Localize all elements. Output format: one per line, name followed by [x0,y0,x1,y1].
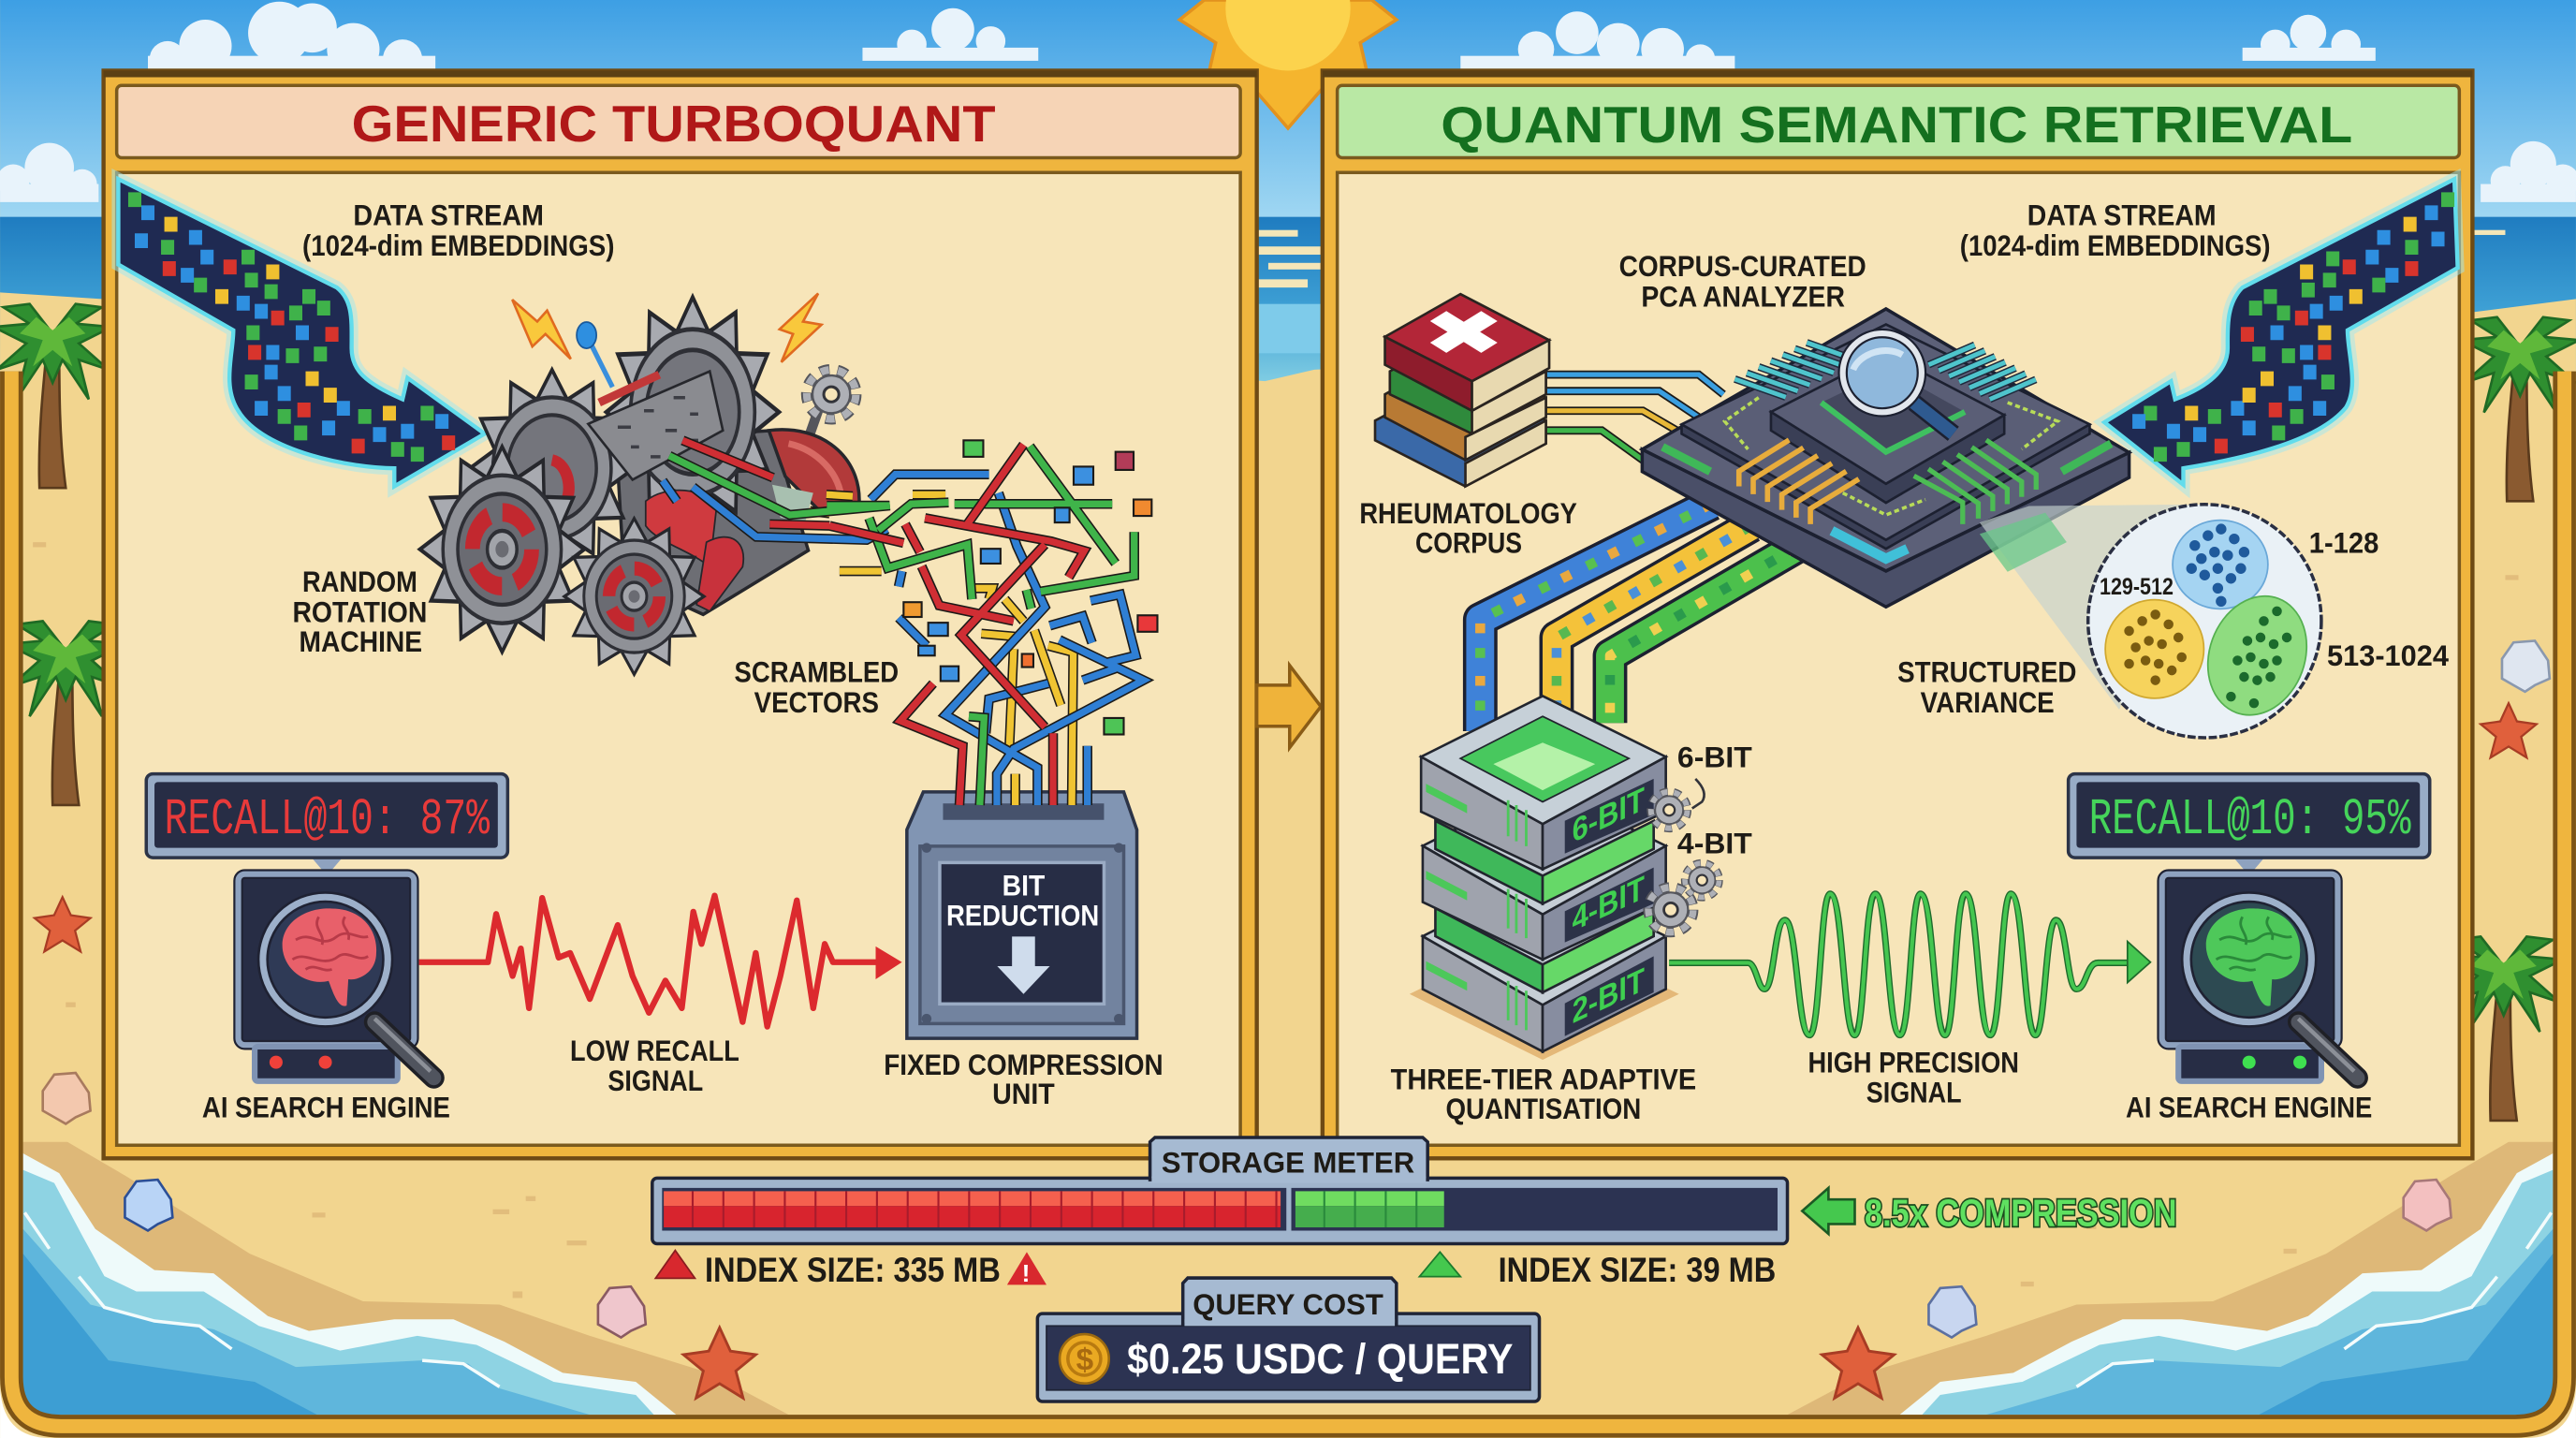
left shoreline waves [23,1142,788,1415]
label: range 513-1024: 513-1024 [2327,638,2449,672]
high precision signal [1669,894,2150,1035]
label: three-tier adaptive quantisation: THREE-TIER ADAPTIVE [1391,1063,1696,1096]
label: rheumatology corpus: CORPUS [1415,526,1522,560]
label: fixed compression unit: FIXED COMPRESSION [884,1048,1164,1081]
label: low recall signal: SIGNAL [607,1064,703,1097]
label: structured variance: STRUCTURED [1897,654,2076,688]
icon: usdc coin [1060,1334,1109,1384]
three-tier adaptive quantisation stack [1410,696,1679,1060]
title band: generic turboquant: GENERIC TURBOQUANT [352,95,996,153]
label: structured variance: VARIANCE [1921,685,2055,719]
label: low recall signal: LOW RECALL [570,1034,739,1067]
label: random rotation machine: ROTATION [292,594,427,628]
arrow: compression [1802,1188,1854,1234]
icon: usdc coin: $ [1076,1343,1094,1378]
label: rheumatology corpus [1359,496,1577,560]
data stream ribbon right [2104,179,2458,485]
label: three-tier adaptive quantisation [1391,1063,1696,1125]
storage meter tab: STORAGE METER [1162,1145,1414,1179]
icon: stack cogs [1648,779,1720,932]
label: high precision signal: SIGNAL [1866,1075,1962,1108]
panel: quantum semantic retrieval [1323,70,2472,1158]
data stream ribbon left [118,179,485,486]
label: low recall signal [570,1034,739,1097]
label: ai search engine left: AI SEARCH ENGINE [202,1090,450,1123]
label: corpus-curated pca analyzer: PCA ANALYZER [1641,279,1845,313]
label: range 1-128: 1-128 [2309,526,2378,560]
index size red marker [655,1251,695,1278]
ai search engine right [2162,874,2358,1081]
label: fixed compression unit [884,1048,1164,1110]
label: data stream: (1024-dim EMBEDDINGS) [302,228,614,262]
query cost: $0.25 USDC / QUERY [1127,1335,1513,1383]
label: data stream: (1024-dim EMBEDDINGS) [1960,228,2271,262]
title band: quantum semantic retrieval [1338,85,2459,157]
arrow: between panels [1257,666,1321,748]
query cost tab [1183,1278,1397,1326]
clouds [0,2,2576,202]
label: data stream: DATA STREAM [353,198,544,231]
bar: green index size [1295,1191,1444,1227]
icon: warning triangle [1007,1252,1046,1287]
label: high precision signal: HIGH PRECISION [1808,1046,2019,1079]
text: 4-bit plate: 4-BIT [1573,869,1645,939]
label: random rotation machine: RANDOM [302,565,417,598]
label: scrambled vectors: VECTORS [754,685,879,719]
text: 2-bit plate: 2-BIT [1573,961,1645,1031]
label: random rotation machine: MACHINE [299,624,422,658]
ai search engine left [239,874,433,1081]
recall display: 95%: RECALL@10: 95% [2089,792,2411,849]
query cost tab: QUERY COST [1193,1287,1383,1321]
wires from corpus to analyzer [1546,374,1723,460]
index size green marker [1419,1252,1460,1277]
label: data stream [302,198,614,262]
storage meter tab [1150,1137,1427,1183]
label: rheumatology corpus: RHEUMATOLOGY [1359,496,1577,530]
icon: lightning bolts [512,293,822,362]
label: 6-bit: 6-BIT [1677,741,1752,774]
random rotation machine [420,297,859,674]
label: range 129-512: 129-512 [2100,575,2174,600]
icon: red brain [283,908,376,1006]
scrambled vectors [663,440,1157,805]
data ribbons from analyzer to quantiser [1480,504,1796,731]
label: scrambled vectors: SCRAMBLED [735,654,899,688]
starfish and shells [35,640,2550,1398]
bar: red index size [664,1191,1281,1227]
storage meter [652,1137,1788,1244]
structured variance inset [1980,505,2323,738]
sun [1179,0,1397,128]
title band: generic turboquant [117,85,1240,157]
label: high precision signal [1808,1046,2019,1108]
panel: generic turboquant [104,70,1257,1158]
icon: warning triangle: ! [1022,1259,1030,1287]
bit reduction compression unit [907,792,1137,1038]
rheumatology corpus books [1375,294,1549,486]
text: 6-bit plate: 6-BIT [1573,780,1645,850]
pca analyzer chip [1642,309,2130,607]
label: three-tier adaptive quantisation: QUANTISATION [1445,1092,1641,1125]
label: corpus-curated pca analyzer [1619,249,1866,313]
label: index size 335 mb: INDEX SIZE: 335 MB [705,1251,1001,1289]
label: fixed compression unit: UNIT [992,1077,1055,1110]
label: data stream: DATA STREAM [2027,198,2217,231]
label: 4-bit: 4-BIT [1677,827,1752,860]
label: index size 39 mb: INDEX SIZE: 39 MB [1499,1251,1776,1289]
palm trees [0,304,2576,1121]
outer gold frame [0,372,2576,1438]
label: scrambled vectors [735,654,899,719]
label: corpus-curated pca analyzer: CORPUS-CURATED [1619,249,1866,283]
bit reduction compression unit: BIT [1003,868,1045,902]
query cost [1037,1278,1540,1401]
recall display: 95% [2069,774,2430,875]
label: ai search engine right: AI SEARCH ENGINE [2126,1090,2372,1123]
label: data stream [1960,198,2271,262]
low recall signal [419,896,902,1027]
icon: green brain [2206,908,2300,1006]
title band: quantum semantic retrieval: QUANTUM SEMANTIC RETRIEVAL [1441,96,2352,154]
label: structured variance [1897,654,2076,719]
label: random rotation machine [292,565,427,658]
callout: 8.5x compression: 8.5x COMPRESSION [1865,1191,2176,1234]
recall display: 87% [146,774,507,875]
right shoreline waves [1788,1142,2553,1415]
bit reduction compression unit: REDUCTION [946,899,1099,932]
recall display: 87%: RECALL@10: 87% [165,792,490,849]
